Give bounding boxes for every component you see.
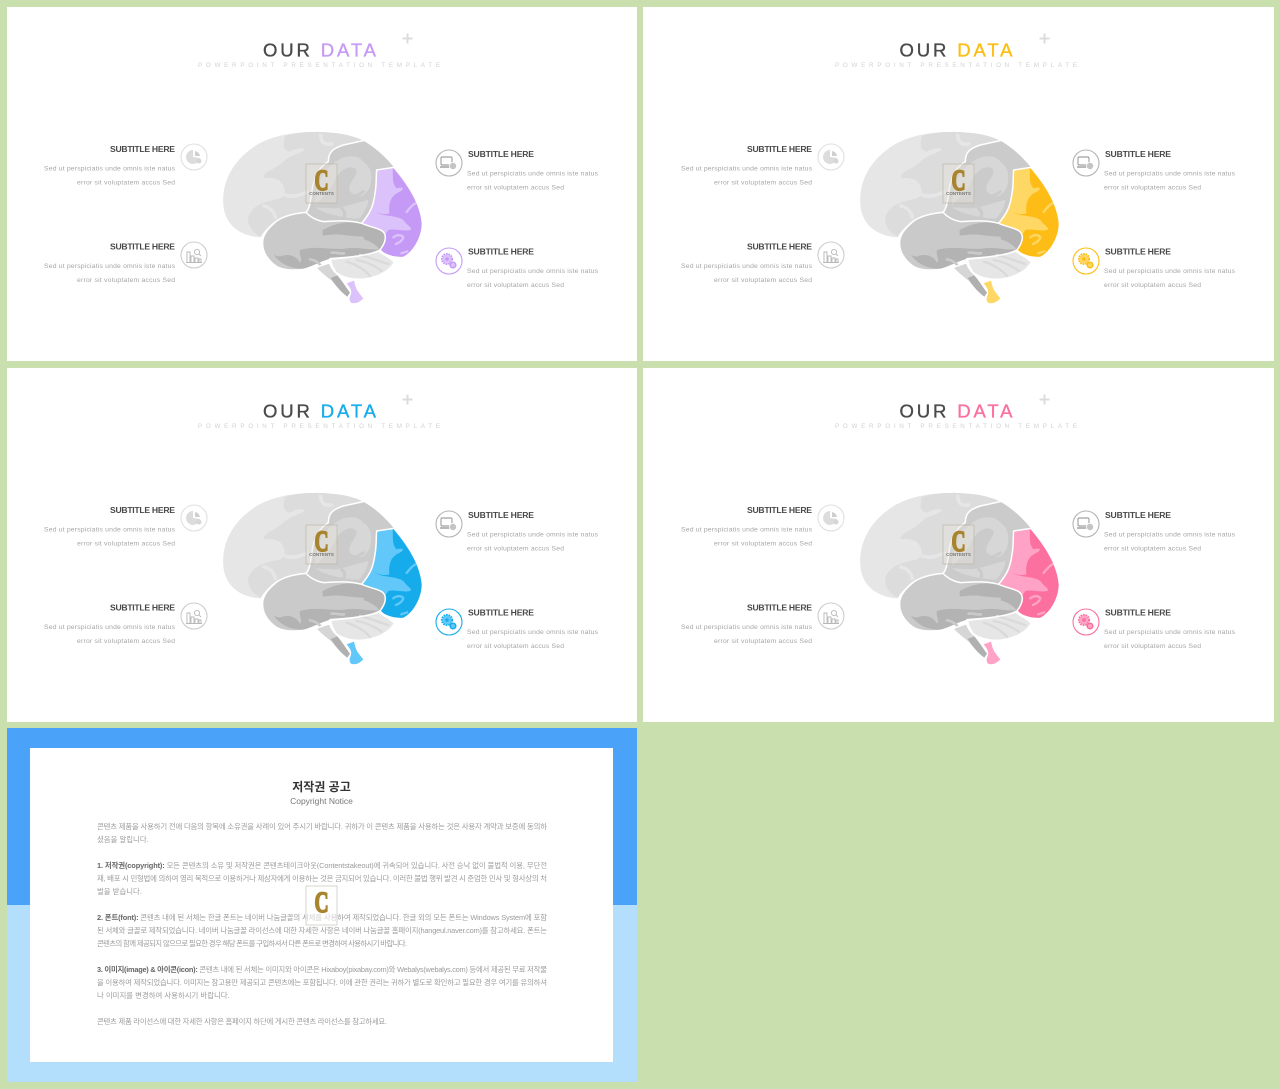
text block: bottom left: error sit voluptatem accus Sed bbox=[714, 638, 812, 645]
subtitle: POWERPOINT PRESENTATION TEMPLATE bbox=[198, 423, 440, 430]
brain diagram bbox=[223, 493, 422, 664]
text block: top left bbox=[44, 144, 176, 186]
text block: font: 콘텐츠의 함께 제공되지 않으므로 필요한 경우 해당 폰트를 구입하셔서 다른 폰트로 변경하여 사용하시기 바랍니다. bbox=[97, 939, 407, 948]
text block: top right: SUBTITLE HERE bbox=[468, 510, 534, 520]
text block: font: 된 서체와 글꼴로 제작되었습니다. 네이버 나눔글꼴 라이선스에 대한 자세한 사항은 네이버 나눔글꼴 홈페이지(hangeul.naver.com)를 참고하세요. 폰트는 bbox=[97, 926, 547, 935]
text block: bottom right: Sed ut perspiciatis unde omnis iste natus bbox=[1104, 629, 1236, 636]
panel: blue slide bbox=[7, 368, 637, 722]
heading: copyright: 저작권 공고 bbox=[292, 779, 351, 794]
logo watermark: C bbox=[951, 165, 966, 197]
heading: our data: OUR DATA bbox=[263, 400, 377, 422]
panel: pink slide bbox=[643, 368, 1274, 722]
text block: bottom right: Sed ut perspiciatis unde omnis iste natus bbox=[467, 268, 599, 275]
logo watermark bbox=[943, 164, 974, 203]
text block: image and icon: 나 이미지를 변경하여 사용하시기 바랍니다. bbox=[97, 991, 230, 1000]
logo watermark: C bbox=[951, 526, 966, 558]
text block: bottom right: Sed ut perspiciatis unde omnis iste natus bbox=[467, 629, 599, 636]
text block: bottom left bbox=[681, 602, 813, 645]
icon: pie chart bbox=[818, 505, 844, 531]
logo watermark: CONTENTS bbox=[309, 552, 334, 557]
brain diagram bbox=[223, 132, 422, 303]
text block: top left: error sit voluptatem accus Sed bbox=[77, 180, 175, 186]
text block: bottom right: SUBTITLE HERE bbox=[468, 608, 534, 618]
text block: top left: SUBTITLE HERE bbox=[747, 144, 812, 154]
text block: bottom right: SUBTITLE HERE bbox=[468, 246, 534, 256]
logo watermark: CONTENTS bbox=[946, 552, 971, 557]
text block: top right: Sed ut perspiciatis unde omnis iste natus bbox=[1104, 532, 1236, 538]
subheading: copyright notice: Copyright Notice bbox=[290, 796, 353, 806]
subtitle: POWERPOINT PRESENTATION TEMPLATE bbox=[198, 62, 440, 69]
logo watermark: C bbox=[314, 165, 329, 197]
text block: bottom right: SUBTITLE HERE bbox=[1105, 246, 1171, 256]
subtitle: POWERPOINT PRESENTATION TEMPLATE bbox=[835, 62, 1077, 69]
icon: bar search bbox=[818, 242, 844, 268]
text block: bottom left: error sit voluptatem accus Sed bbox=[77, 277, 175, 284]
text block: top right: SUBTITLE HERE bbox=[1105, 510, 1171, 520]
text block: top right: SUBTITLE HERE bbox=[468, 149, 534, 159]
icon: plus bbox=[1040, 34, 1050, 44]
text block: bottom left: Sed ut perspiciatis unde omnis iste natus bbox=[44, 624, 176, 631]
icon: gear bbox=[1073, 609, 1099, 635]
heading: our data: OUR DATA bbox=[900, 400, 1013, 422]
icon: gear bbox=[436, 609, 462, 635]
text block: bottom left: SUBTITLE HERE bbox=[747, 602, 812, 612]
text block: bottom right bbox=[1104, 246, 1236, 289]
logo watermark: C bbox=[314, 526, 329, 558]
logo watermark bbox=[306, 886, 337, 925]
text block: bottom right bbox=[467, 608, 599, 650]
text block: bottom right: Sed ut perspiciatis unde omnis iste natus bbox=[1104, 268, 1236, 275]
text block: image and icon: 3. 이미지(image) & 아이콘(icon): 콘텐츠 내에 된 서체는 이미지와 아이콘은 Hixaboy(pixabay.com)와 Webalys(webalys.com) 등에서 제공된 무료 저작물 bbox=[97, 965, 547, 974]
logo watermark bbox=[306, 164, 337, 203]
text block: copyright: 재, 배포 시 민형법에 의하여 영리 목적으로 이용하거나 제삼자에게 이용하는 것은 금지되어 있습니다. 이러한 불법 행위 발견 시 준엄한 민사 및 형사상의 처 bbox=[97, 874, 547, 883]
icon: laptop bbox=[1073, 511, 1099, 537]
text block: top right: Sed ut perspiciatis unde omnis iste natus bbox=[467, 532, 599, 538]
text block: top right: error sit voluptatem accus Sed bbox=[467, 546, 564, 552]
text block: top right bbox=[467, 149, 599, 192]
text block: intro: 셨음을 알립니다. bbox=[97, 835, 149, 844]
icon: bar search bbox=[818, 603, 844, 629]
text block: bottom right: error sit voluptatem accus Sed bbox=[1104, 643, 1201, 650]
text block: top left: error sit voluptatem accus Sed bbox=[77, 540, 175, 548]
text block: bottom right: SUBTITLE HERE bbox=[1105, 608, 1171, 618]
text block: top left bbox=[681, 505, 813, 548]
logo watermark bbox=[943, 525, 974, 564]
text block: top left: Sed ut perspiciatis unde omnis iste natus bbox=[681, 166, 813, 172]
panel: purple slide bbox=[7, 7, 637, 361]
text block: top left bbox=[44, 505, 176, 548]
logo watermark: CONTENTS bbox=[946, 191, 971, 196]
icon: plus bbox=[402, 34, 412, 44]
text block: bottom right: error sit voluptatem accus Sed bbox=[467, 643, 564, 650]
text block: bottom left: SUBTITLE HERE bbox=[110, 602, 175, 612]
icon: pie chart bbox=[818, 144, 844, 170]
text block: top right: error sit voluptatem accus Sed bbox=[1104, 546, 1201, 552]
text block: bottom right bbox=[1104, 608, 1236, 650]
text block: top left: Sed ut perspiciatis unde omnis iste natus bbox=[44, 526, 176, 534]
brain diagram bbox=[860, 132, 1059, 303]
text block: bottom right: error sit voluptatem accus Sed bbox=[467, 282, 564, 289]
text block: closing: 콘텐츠 제품 라이선스에 대한 자세한 사항은 홈페이지 하단에 게시한 콘텐츠 라이선스를 참고하세요. bbox=[97, 1017, 387, 1026]
text block: top right: Sed ut perspiciatis unde omnis iste natus bbox=[467, 170, 599, 178]
text block: font: 2. 폰트(font): 콘텐츠 내에 된 서체는 한글 폰트는 네이버 나눔글꼴의 서체를 사용하여 제작되었습니다. 한글 외의 모든 폰트는 Windows System에 포함 bbox=[97, 913, 547, 922]
text block: bottom left: Sed ut perspiciatis unde omnis iste natus bbox=[44, 263, 176, 270]
text block: bottom right: error sit voluptatem accus Sed bbox=[1104, 282, 1201, 289]
brain diagram bbox=[860, 493, 1059, 664]
text block: bottom left: SUBTITLE HERE bbox=[110, 242, 175, 252]
text block: bottom left: error sit voluptatem accus Sed bbox=[714, 277, 812, 284]
text block: top left: SUBTITLE HERE bbox=[110, 144, 175, 154]
text block: intro bbox=[97, 822, 547, 844]
panel: yellow slide bbox=[643, 7, 1274, 361]
icon: gear bbox=[1073, 248, 1099, 274]
icon: laptop bbox=[436, 511, 462, 537]
logo watermark bbox=[306, 525, 337, 564]
logo watermark: CONTENTS bbox=[309, 191, 334, 196]
icon: bar search bbox=[181, 242, 207, 268]
text block: top right: SUBTITLE HERE bbox=[1105, 149, 1171, 159]
icon: plus bbox=[402, 394, 412, 404]
text block: bottom left: error sit voluptatem accus Sed bbox=[77, 638, 175, 645]
panel: copyright notice bbox=[7, 728, 637, 1082]
icon: pie chart bbox=[181, 505, 207, 531]
text block: top right bbox=[1104, 510, 1236, 552]
text block: top right: Sed ut perspiciatis unde omnis iste natus bbox=[1104, 170, 1236, 178]
text block: top right: error sit voluptatem accus Sed bbox=[467, 184, 564, 192]
text block: top right bbox=[1104, 149, 1236, 192]
text block: font bbox=[97, 913, 547, 948]
subtitle: POWERPOINT PRESENTATION TEMPLATE bbox=[835, 423, 1077, 430]
text block: top left: Sed ut perspiciatis unde omnis iste natus bbox=[681, 526, 813, 534]
text block: bottom left: SUBTITLE HERE bbox=[747, 242, 812, 252]
heading: our data: OUR DATA bbox=[263, 40, 377, 60]
icon: bar search bbox=[181, 603, 207, 629]
icon: plus bbox=[1040, 394, 1050, 404]
text block: bottom left: Sed ut perspiciatis unde omnis iste natus bbox=[681, 624, 813, 631]
text block: top left: error sit voluptatem accus Sed bbox=[714, 540, 812, 548]
text block: top left: SUBTITLE HERE bbox=[747, 505, 812, 515]
logo watermark: C bbox=[314, 887, 329, 919]
icon: gear bbox=[436, 248, 462, 274]
text block: top left bbox=[681, 144, 813, 186]
icon: laptop bbox=[1073, 150, 1099, 176]
text block: top left: Sed ut perspiciatis unde omnis iste natus bbox=[44, 166, 176, 172]
text block: copyright: 벌을 받습니다. bbox=[97, 887, 142, 896]
text block: top left: error sit voluptatem accus Sed bbox=[714, 180, 812, 186]
text block: top right bbox=[467, 510, 599, 552]
text block: intro: 콘텐츠 제품을 사용하기 전에 다음의 항목에 소유권을 사례이 있어 주시기 바랍니다. 귀하가 이 콘텐츠 제품을 사용하는 것은 사용자 계약과 보증에 동의하 bbox=[97, 822, 547, 831]
text block: image and icon bbox=[97, 965, 547, 1000]
text block: image and icon: 을 이용하여 제작되었습니다. 이미지는 참고용만 제공되고 콘텐츠에는 포함됩니다. 이에 관한 권리는 귀하가 별도로 확인하고 필요한 경우 여기를 유의하셔 bbox=[97, 978, 547, 987]
text block: top right: error sit voluptatem accus Sed bbox=[1104, 184, 1201, 192]
text block: bottom left: Sed ut perspiciatis unde omnis iste natus bbox=[681, 263, 813, 270]
text block: top left: SUBTITLE HERE bbox=[110, 505, 175, 515]
text block: bottom left bbox=[44, 602, 176, 645]
icon: laptop bbox=[436, 150, 462, 176]
text block: bottom left bbox=[681, 242, 813, 284]
icon: pie chart bbox=[181, 144, 207, 170]
heading: our data: OUR DATA bbox=[900, 40, 1013, 60]
text block: bottom right bbox=[467, 246, 599, 289]
text block: copyright: 1. 저작권(copyright): 모든 콘텐츠의 소유 및 저작권은 콘텐츠테이크아웃(Contentstakeout)에 귀속되어 있습니다. 사전 승낙 없이 불법적 이용, 무단전 bbox=[97, 861, 547, 870]
text block: bottom left bbox=[44, 242, 176, 284]
text block: copyright bbox=[97, 861, 547, 896]
